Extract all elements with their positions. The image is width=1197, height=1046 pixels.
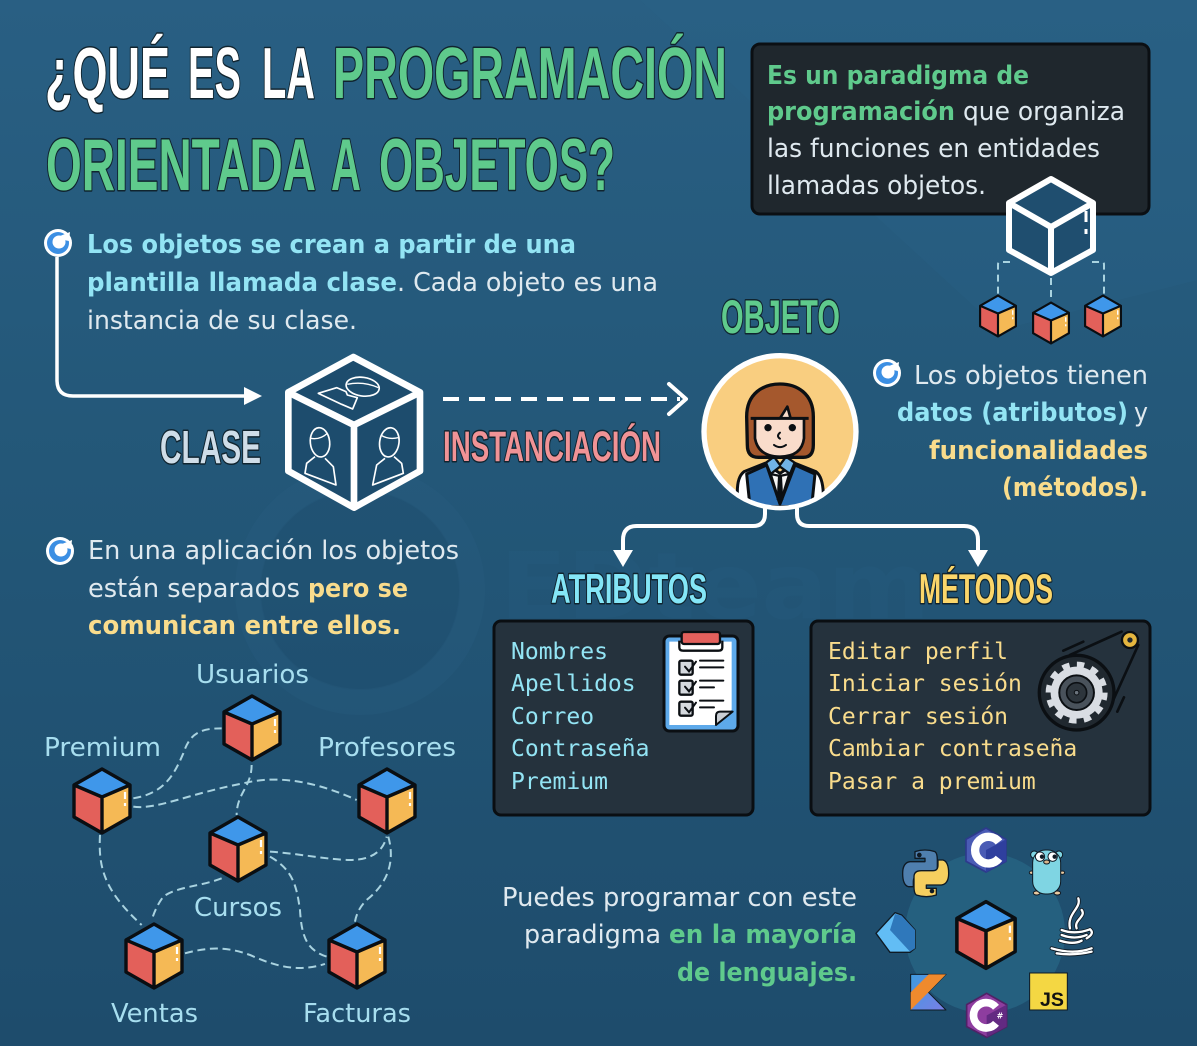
attribute list: Nombres [511,639,608,665]
icon: JavaScript: JS [1040,990,1064,1011]
connections [100,728,391,968]
node: ventas: Ventas [111,999,198,1029]
text block: classes: Los objetos se crean a partir de una [87,230,576,260]
diagram: programming languages [876,828,1092,1037]
attribute list: Correo [511,704,594,730]
text block: object data: (métodos). [1002,473,1148,503]
node: facturas [303,924,411,1029]
node: usuarios [196,660,309,760]
title: OBJETOS? [379,125,615,206]
icon: object hierarchy [980,179,1121,343]
heading: atributos: ATRIBUTOS [551,565,707,612]
definition text: Es un paradigma de [767,61,1029,91]
method list: Iniciar sesión [828,671,1022,697]
text block: communication: En una aplicación los objetos [88,536,459,566]
node: cursos: Cursos [194,893,282,923]
title: ORIENTADA [46,125,316,206]
icon group: languages [876,828,1092,1037]
panel: methods [811,621,1150,815]
text block: object data: datos (atributos) [897,398,1128,428]
heading: métodos: MÉTODOS [919,565,1053,612]
icon: JavaScript [1030,973,1067,1011]
text block: object data [873,359,1148,503]
arrow: instantiation [443,384,686,414]
node: profesores [318,733,456,833]
title: ¿QUÉ [45,34,170,114]
method list [828,639,1077,795]
method list: Cambiar contraseña [828,736,1077,762]
node: facturas: Facturas [303,999,411,1029]
node: premium [44,733,161,833]
text block: languages: de lenguajes. [677,958,857,988]
text block: languages: paradigma [524,920,661,950]
text block: communication: pero se [308,574,408,604]
title [45,33,727,206]
text block: object data: y [1134,398,1148,428]
text block: communication: comunican entre ellos. [88,611,401,641]
text block: classes: instancia de su clase. [87,306,357,336]
heading: instanciación: INSTANCIACIÓN [443,422,661,471]
text block: object data: funcionalidades [929,436,1148,466]
title: PROGRAMACIÓN [333,33,727,114]
attribute list: Apellidos [511,671,636,697]
title: A [331,125,361,206]
icon: Java [1052,898,1092,954]
attribute list [511,639,649,795]
diagram: communicating objects [44,660,456,1029]
method list: Cerrar sesión [828,704,1008,730]
node: cursos [194,817,282,923]
node: usuarios: Usuarios [196,660,309,690]
icon: gear [1039,632,1138,730]
text block: languages: en la mayoría [669,920,857,950]
text block: classes: plantilla llamada clase [87,268,397,298]
icon: Go gopher [1029,850,1065,895]
icon: Kotlin [911,974,946,1010]
definition text: programación [767,97,955,127]
definition text [767,61,1125,201]
icon: class cube [288,357,420,508]
text block: classes: . Cada objeto es una [397,268,658,298]
arrows: object to attributes and methods [613,508,988,567]
heading: objeto: OBJETO [721,290,840,343]
node: profesores: Profesores [318,733,456,763]
text block: communication [46,536,459,641]
icon: C sharp [967,993,1007,1037]
attribute list: Premium [511,769,608,795]
title: LA [262,34,315,114]
node: ventas [111,924,198,1029]
panel: definition [752,44,1149,214]
text block: communication: están separados [88,574,300,604]
background: EDteam [500,533,930,640]
text block: languages: Puedes programar con este [502,883,857,913]
icon: central cube [957,902,1015,968]
definition text: llamadas objetos. [767,171,986,201]
text block: object data: Los objetos tienen [914,361,1148,391]
attribute list: Contraseña [511,736,649,762]
text block: languages [502,883,857,988]
heading: clase: CLASE [160,421,261,473]
icon: Dart [876,913,915,952]
icon: Python [903,850,949,897]
node: premium: Premium [44,733,161,763]
icon: C [966,828,1006,872]
definition text: que organiza [963,97,1125,127]
icon: clipboard [664,632,738,731]
arrow: to class [57,257,262,405]
icon: C sharp: # [997,1011,1004,1020]
definition text: las funciones en entidades [767,134,1100,164]
text block: classes [44,229,658,336]
panel: attributes [494,621,753,815]
method list: Editar perfil [828,639,1008,665]
method list: Pasar a premium [828,769,1036,795]
title: ES [188,34,241,114]
icon: person avatar [704,356,856,508]
